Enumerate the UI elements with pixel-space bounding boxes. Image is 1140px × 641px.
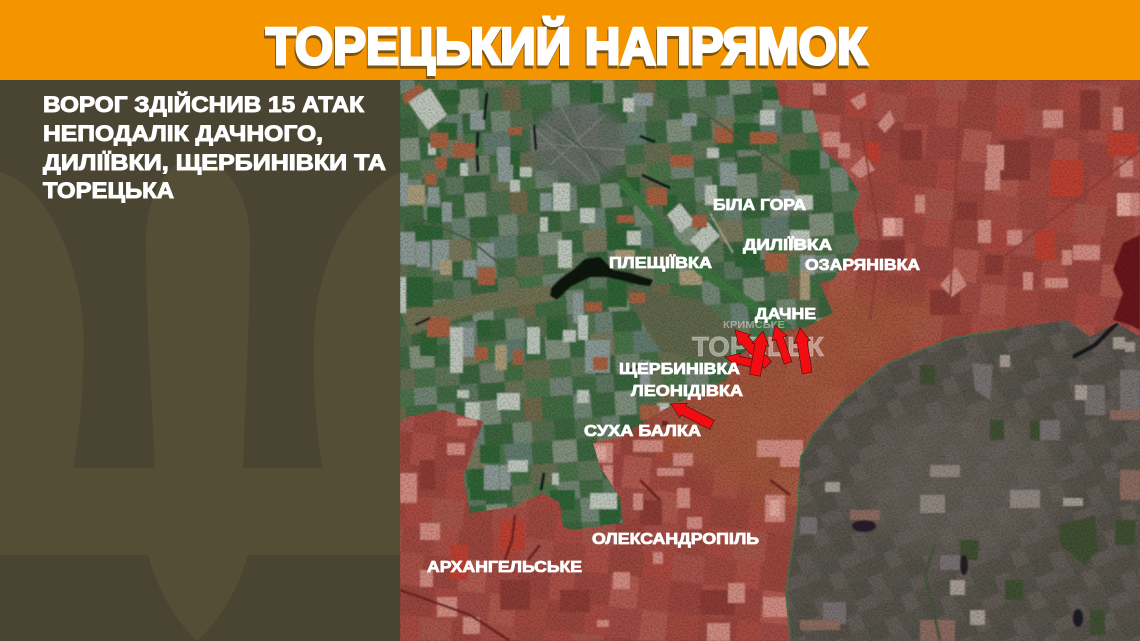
label: Krymske (faded): КРИМСЬКЕ bbox=[723, 319, 785, 331]
map area: free territory fields bbox=[400, 80, 880, 550]
arrow: attack Toretsk north bbox=[747, 329, 771, 377]
arrow: attack Dachne north bbox=[767, 322, 796, 365]
arrow: attack Leonidivka bbox=[667, 397, 716, 432]
panel: satellite map bbox=[400, 80, 1140, 641]
icon: trident watermark bbox=[0, 155, 400, 641]
label: Bila Hora: БІЛА ГОРА bbox=[713, 197, 806, 214]
text block: attack summary bbox=[43, 92, 386, 203]
title: ТОРЕЦЬКИЙ НАПРЯМОК bbox=[266, 17, 867, 76]
arrow: attack Dachne north-east bbox=[792, 327, 815, 374]
text block: attack summary: ДИЛІЇВКИ, ЩЕРБИНІВКИ ТА bbox=[43, 150, 386, 175]
label: Oleksandropil: ОЛЕКСАНДРОПІЛЬ bbox=[592, 531, 759, 548]
label: Pleshchiivka: ПЛЕЩІЇВКА bbox=[609, 254, 713, 272]
label: Dyliivka: ДИЛІЇВКА bbox=[743, 236, 833, 254]
label: Shcherbynivka: ЩЕРБИНІВКА bbox=[619, 361, 740, 378]
map area: Horlivka grey territory bbox=[780, 310, 1140, 641]
label: Toretsk city (faded): ТОРЕЦЬК bbox=[692, 331, 825, 362]
text block: attack summary: НЕПОДАЛІК ДАЧНОГО, bbox=[43, 121, 323, 146]
label: Arkhanhelske: АРХАНГЕЛЬСЬКЕ bbox=[427, 559, 582, 576]
settlement labels bbox=[427, 197, 920, 576]
arrow: attack Shcherbynivka west bbox=[723, 350, 762, 372]
icon: Pleshchiivka reservoir bbox=[550, 257, 653, 300]
header banner bbox=[0, 0, 1140, 80]
arrows: enemy attack directions bbox=[667, 322, 815, 432]
map area: occupied territory red overlay bbox=[400, 80, 1140, 641]
label: Dachne: ДАЧНЕ bbox=[755, 306, 816, 323]
texture: satellite grain bbox=[400, 80, 1140, 641]
label: Leonidivka: ЛЕОНІДІВКА bbox=[631, 383, 744, 400]
label: Ozarianivka: ОЗАРЯНІВКА bbox=[805, 257, 920, 274]
text block: attack summary: ТОРЕЦЬКА bbox=[43, 178, 174, 203]
panel: left text panel bbox=[0, 80, 400, 641]
text block: attack summary: ВОРОГ ЗДІЙСНИВ 15 АТАК bbox=[43, 92, 364, 117]
arrow: attack Krymske north-west bbox=[729, 325, 774, 370]
label: Sukha Balka: СУХА БАЛКА bbox=[584, 423, 702, 440]
